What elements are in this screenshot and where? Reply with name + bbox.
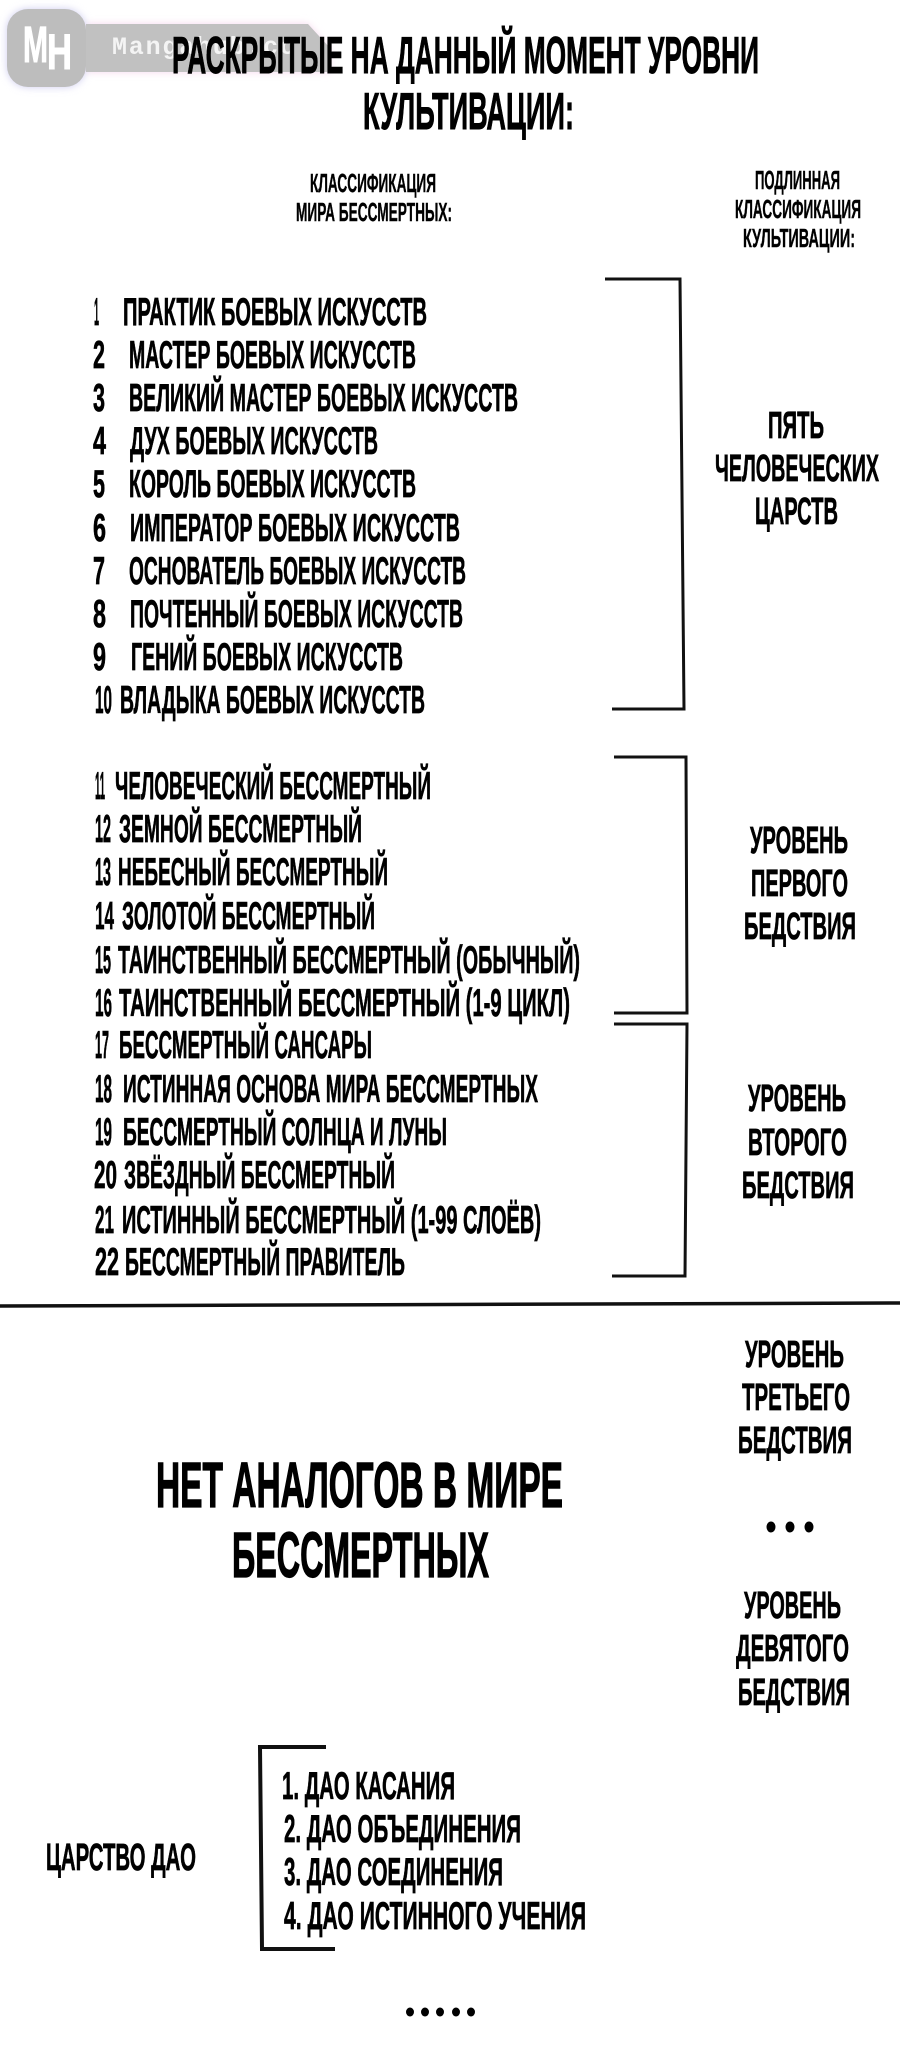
list: ranks 11-16: ЗЕМНОЙ БЕССМЕРТНЫЙ [119, 806, 362, 851]
list: ranks 17-22: БЕССМЕРТНЫЙ ПРАВИТЕЛЬ [125, 1239, 405, 1284]
list: ranks 17-22: БЕССМЕРТНЫЙ СОЛНЦА И ЛУНЫ [123, 1109, 447, 1154]
label: second tribulation level [742, 1078, 854, 1207]
list: ranks 1-10: 6 [93, 507, 106, 550]
bracket: first tribulation level [614, 757, 687, 1013]
list: ranks 17-22: 18 [95, 1068, 112, 1111]
title: КУЛЬТИВАЦИИ: [363, 83, 574, 141]
list: ranks 17-22: 22 [95, 1241, 119, 1284]
list: dao stages: 1. ДАО КАСАНИЯ [282, 1765, 455, 1808]
watermark: MangaHub badge [7, 9, 330, 87]
list: ranks 1-10: ВЛАДЫКА БОЕВЫХ ИСКУССТВ [120, 679, 425, 722]
list: ranks 11-16: 13 [95, 851, 111, 894]
label: dao realm: ЦАРСТВО ДАО [46, 1837, 196, 1879]
list: ranks 1-10: ОСНОВАТЕЛЬ БОЕВЫХ ИСКУССТВ [129, 550, 466, 593]
list: ranks 1-10: 5 [93, 463, 105, 506]
list: ranks 1-10: ВЕЛИКИЙ МАСТЕР БОЕВЫХ ИСКУССТВ [129, 375, 518, 420]
list: ranks 17-22: ЗВЁЗДНЫЙ БЕССМЕРТНЫЙ [124, 1152, 395, 1197]
list: ranks 1-10: 7 [93, 550, 105, 593]
list: ranks 1-10: ПРАКТИК БОЕВЫХ ИСКУССТВ [123, 291, 427, 334]
list: ranks 1-10: КОРОЛЬ БОЕВЫХ ИСКУССТВ [129, 463, 416, 506]
label: five human realms [715, 405, 879, 533]
list: dao stages: 2. ДАО ОБЪЕДИНЕНИЯ [284, 1808, 521, 1851]
list: ranks 1-10: МАСТЕР БОЕВЫХ ИСКУССТВ [129, 334, 416, 377]
heading: no analogues in the immortal world [156, 1449, 563, 1591]
list: ranks 17-22: 21 [95, 1199, 114, 1242]
watermark: MangaHub badge: Mangahub.cc [112, 33, 295, 62]
column heading: immortal world classification [296, 170, 452, 227]
list: ranks 11-16: 11 [95, 765, 105, 808]
list: ranks 1-10: ПОЧТЕННЫЙ БОЕВЫХ ИСКУССТВ [130, 591, 463, 636]
list: ranks 1-10: 3 [93, 377, 105, 420]
list: ranks 17-22: 19 [95, 1111, 112, 1154]
column heading: immortal world classification: МИРА БЕССМЕРТНЫХ: [296, 199, 452, 227]
label: first tribulation level [744, 820, 856, 948]
list: ranks 1-10: ГЕНИЙ БОЕВЫХ ИСКУССТВ [131, 634, 403, 679]
list: ranks 11-16: ЧЕЛОВЕЧЕСКИЙ БЕССМЕРТНЫЙ [115, 763, 431, 808]
list: dao stages: 4. ДАО ИСТИННОГО УЧЕНИЯ [284, 1895, 586, 1938]
bracket: five human realms [605, 279, 684, 709]
list: ranks 11-16: 16 [95, 982, 112, 1025]
label: five human realms: ПЯТЬ [768, 405, 824, 447]
list: ranks 17-22: БЕССМЕРТНЫЙ САНСАРЫ [119, 1022, 372, 1067]
list: ranks 17-22: 20 [94, 1154, 117, 1197]
heading: no analogues in the immortal world: БЕССМЕРТНЫХ [232, 1519, 489, 1591]
trailing ellipsis [406, 2008, 475, 2016]
ellipsis between levels [766, 1522, 814, 1532]
list: dao stages: 3. ДАО СОЕДИНЕНИЯ [284, 1851, 503, 1894]
list: ranks 1-10: 9 [93, 636, 106, 679]
list: ranks 11-16: 12 [95, 808, 111, 851]
label: third tribulation level [738, 1334, 852, 1462]
list: ranks 1-10: 1 [94, 291, 99, 334]
list: ranks 11-16: 14 [95, 895, 114, 938]
list: dao stages [282, 1765, 586, 1938]
title [172, 26, 759, 141]
list: ranks 1-10: ИМПЕРАТОР БОЕВЫХ ИСКУССТВ [130, 507, 460, 550]
bracket: dao realm [260, 1747, 335, 1949]
list: ranks 11-16: ЗОЛОТОЙ БЕССМЕРТНЫЙ [122, 893, 375, 938]
label: ninth tribulation level [736, 1585, 850, 1714]
watermark: MangaHub badge: M [23, 16, 48, 73]
watermark: MangaHub badge: H [47, 24, 72, 80]
list: ranks 11-16 [95, 763, 580, 1025]
list: ranks 1-10: 8 [93, 593, 106, 636]
list: ranks 1-10: 10 [95, 679, 112, 722]
list: ranks 11-16: 15 [95, 939, 111, 982]
list: ranks 1-10: 4 [93, 420, 106, 463]
column heading: true cultivation classification [735, 167, 861, 253]
column heading: immortal world classification: КЛАССИФИКАЦИЯ [310, 170, 436, 198]
list: ranks 17-22: 17 [95, 1024, 109, 1067]
list: ranks 17-22 [94, 1022, 541, 1284]
list: ranks 1-10: ДУХ БОЕВЫХ ИСКУССТВ [130, 420, 378, 463]
list: ranks 1-10: 2 [93, 334, 105, 377]
list: ranks 1-10 [93, 291, 518, 722]
list: ranks 11-16: НЕБЕСНЫЙ БЕССМЕРТНЫЙ [118, 849, 388, 894]
bracket: second tribulation level [612, 1024, 687, 1276]
